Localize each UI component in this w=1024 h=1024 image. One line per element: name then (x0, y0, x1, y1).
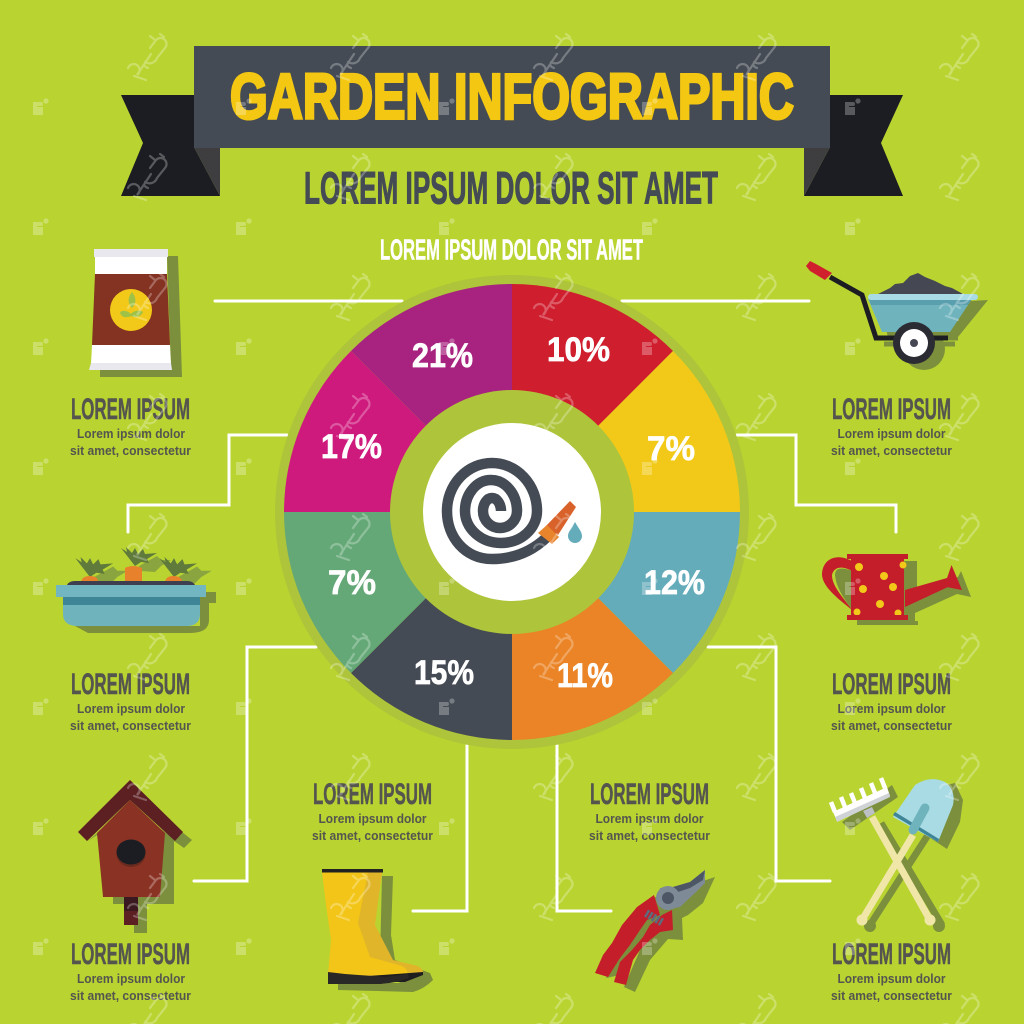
label: planter (70, 668, 191, 733)
label: bag: LOREM IPSUM (71, 393, 190, 426)
slice: 21% (351, 284, 512, 512)
label: bag: Lorem ipsum dolor (77, 427, 185, 441)
centre disc (423, 423, 601, 601)
label: bag (70, 393, 191, 458)
subtitle: LOREM IPSUM DOLOR SIT AMET (304, 162, 718, 214)
label: bag: sit amet, consectetur (70, 444, 191, 458)
title: GARDEN INFOGRAPHIC (230, 60, 794, 132)
percentage labels: 11% (557, 657, 613, 695)
percentage labels: 17% (321, 428, 382, 466)
icon: garden hose (447, 463, 582, 559)
label: wheelbarrow: sit amet, consectetur (831, 444, 952, 458)
icon: fertilizer bag (89, 249, 182, 377)
icon: pruning shears (595, 870, 715, 992)
label: boots: LOREM IPSUM (313, 778, 432, 811)
slice: 15% (351, 512, 512, 740)
label: birdhouse: sit amet, consectetur (70, 989, 191, 1003)
chart heading: LOREM IPSUM DOLOR SIT AMET (380, 234, 643, 266)
icon: wheelbarrow (806, 261, 988, 370)
slice: 11% (512, 512, 673, 740)
inner ring (390, 390, 634, 634)
label: rake and shovel: sit amet, consectetur (831, 989, 952, 1003)
label: birdhouse: LOREM IPSUM (71, 938, 190, 971)
percentage labels: 7% (647, 430, 695, 468)
donut chart (275, 275, 749, 749)
label: planter: LOREM IPSUM (71, 668, 190, 701)
percentage labels: 15% (414, 654, 474, 692)
label: boots: sit amet, consectetur (312, 829, 433, 843)
icon: watering can (822, 554, 971, 625)
label: birdhouse (70, 938, 191, 1003)
label: planter: sit amet, consectetur (70, 719, 191, 733)
label: shears: LOREM IPSUM (590, 778, 709, 811)
slice: 12% (512, 512, 740, 673)
slice: 7% green (284, 512, 512, 673)
label: boots (312, 778, 433, 843)
percentage labels: 10% (547, 331, 610, 369)
label: boots: Lorem ipsum dolor (318, 812, 427, 826)
label: shears: sit amet, consectetur (589, 829, 710, 843)
slice: 10% (512, 284, 673, 512)
icon: rake and shovel (831, 778, 963, 932)
icon: carrot planter (56, 547, 216, 633)
percentage labels: 21% (412, 337, 473, 375)
label: watering can: sit amet, consectetur (831, 719, 952, 733)
label: watering can: Lorem ipsum dolor (838, 702, 946, 716)
label: shears (589, 778, 710, 843)
icon: rubber boots (322, 869, 433, 992)
label: birdhouse: Lorem ipsum dolor (77, 972, 185, 986)
label: watering can (831, 668, 952, 733)
label: rake and shovel (831, 938, 952, 1003)
percentage labels (321, 331, 705, 695)
label: wheelbarrow (831, 393, 952, 458)
percentage labels: 12% (644, 564, 705, 602)
slice: 7% yellow (512, 351, 740, 512)
slice: 17% (284, 351, 512, 512)
label: shears: Lorem ipsum dolor (596, 812, 704, 826)
banner ribbon (121, 46, 903, 196)
icon: birdhouse (78, 780, 192, 933)
connector lines (128, 301, 896, 911)
label: planter: Lorem ipsum dolor (77, 702, 185, 716)
label: wheelbarrow: Lorem ipsum dolor (838, 427, 946, 441)
percentage labels: 7% (328, 564, 376, 602)
label: rake and shovel: Lorem ipsum dolor (838, 972, 946, 986)
